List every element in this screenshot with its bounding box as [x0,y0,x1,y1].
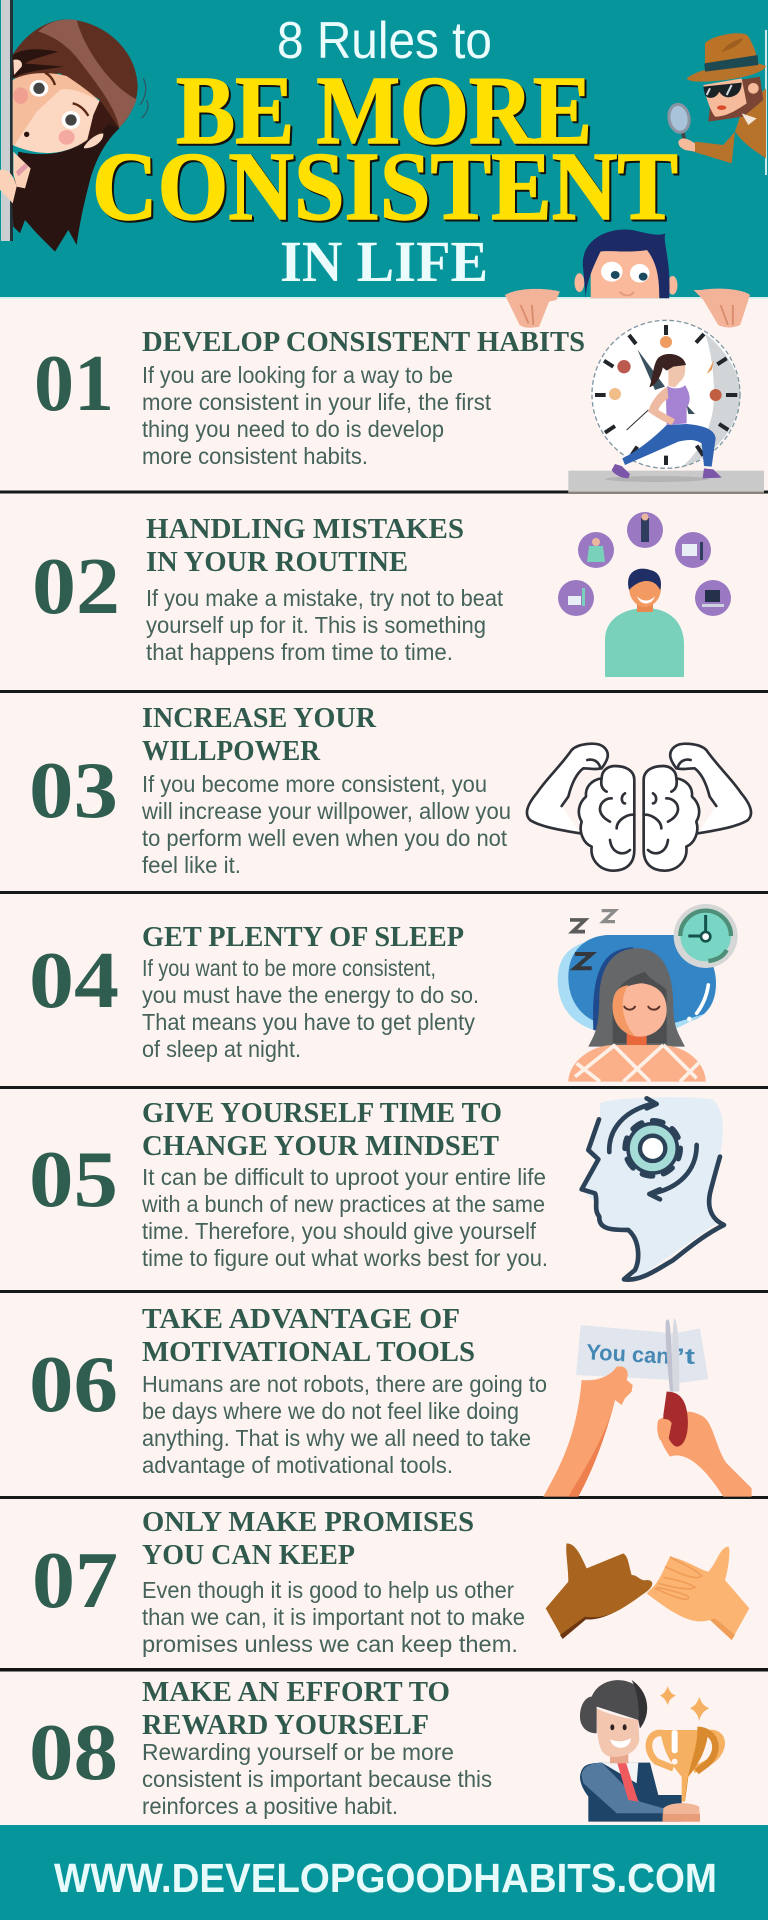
body 04: That means you have to get plenty [142,1009,475,1035]
body 05: time. Therefore, you should give yourself [142,1218,536,1244]
body 08 [142,1739,492,1819]
panel: rule 02 [32,513,503,665]
number 04: 04 [29,935,119,1025]
heading 02: IN YOUR ROUTINE [146,546,408,578]
body 01: thing you need to do is develop [142,416,444,442]
panel: rule 05 [29,1097,548,1271]
illustration: hands cutting You can't note [543,1318,752,1497]
footer band [0,1825,768,1920]
body 02: If you make a mistake, try not to beat [146,585,503,611]
title line: CONSISTENT: CONSISTENT [92,133,678,240]
body 02 [146,585,503,665]
illustration: head with gear [582,1097,724,1280]
body 01: If you are looking for a way to be [142,362,453,388]
body 04 [142,955,479,1062]
number 02: 02 [32,541,120,631]
body 06: be days where we do not feel like doing [142,1398,519,1424]
body 05 [141,1164,548,1271]
panel: rule 06 [29,1303,547,1478]
heading 02: HANDLING MISTAKES [146,513,464,545]
heading 06: TAKE ADVANTAGE OF [142,1303,460,1335]
body 05: It can be difficult to uproot your entire life [142,1164,546,1190]
number 06: 06 [29,1339,118,1429]
number 03: 03 [29,745,118,835]
number 05: 05 [29,1134,118,1224]
panel: rule 08 [29,1676,492,1819]
heading 03: WILLPOWER [142,735,321,767]
body 07 [142,1577,525,1657]
heading 07: ONLY MAKE PROMISES [142,1506,474,1538]
panel: rule 04 [29,921,479,1062]
heading 04: GET PLENTY OF SLEEP [142,921,464,953]
illustration: man with five routine bubbles [558,512,731,677]
number 07: 07 [32,1535,118,1625]
body 06 [142,1371,547,1478]
body 02: yourself up for it. This is something [146,612,486,638]
divider 4 [0,1086,768,1089]
panel: rule 03 [29,702,511,878]
body 08: reinforces a positive habit. [142,1793,398,1819]
body 03: feel like it. [142,852,241,878]
body 05: with a bunch of new practices at the same [141,1191,545,1217]
heading 08: REWARD YOURSELF [142,1709,429,1741]
heading 07: YOU CAN KEEP [142,1539,355,1571]
body 08: consistent is important because this [142,1766,492,1792]
divider 5 [0,1290,768,1293]
divider 7 [0,1668,768,1672]
heading 08 [142,1676,450,1741]
heading 03 [142,702,377,767]
body 03: will increase your willpower, allow you [141,798,511,824]
body 06: Humans are not robots, there are going to [142,1371,547,1397]
panel: rule 07 [32,1506,525,1657]
footer url: WWW.DEVELOPGOODHABITS.COM [54,1855,717,1901]
body 08: Rewarding yourself or be more [142,1739,454,1765]
illustration: man peeking over panel [505,229,750,328]
body 04: If you want to be more consistent, [142,955,436,981]
number 01: 01 [34,338,114,428]
heading 06 [142,1303,475,1368]
title line: 8 Rules to: 8 Rules to [277,12,492,70]
illustration: detective with magnifier [667,33,766,163]
illustration: door edge [1,0,13,241]
body 04: of sleep at night. [142,1036,301,1062]
illustration: peeking girl [0,19,148,252]
body 06: advantage of motivational tools. [142,1452,453,1478]
illustration: muscular brain [527,744,751,871]
body 05: time to figure out what works best for you. [142,1245,548,1271]
illustration: pinky promise hands [546,1543,749,1640]
body 03 [141,771,511,878]
illustration: hands cutting You can't note: You can [586,1339,670,1369]
header band [0,0,768,299]
body 03: to perform well even when you do not [142,825,507,851]
heading 03: INCREASE YOUR [142,702,377,734]
body 06: anything. That is why we all need to take [142,1425,531,1451]
body 04: you must have the energy to do so. [142,982,479,1008]
heading 06: MOTIVATIONAL TOOLS [142,1336,475,1368]
number 08: 08 [29,1707,118,1797]
body 03: If you become more consistent, you [142,771,487,797]
heading 08: MAKE AN EFFORT TO [142,1676,450,1708]
divider 3 [0,891,768,894]
illustration: businessman with trophy [580,1680,722,1822]
body 07: promises unless we can keep them. [142,1631,518,1657]
illustration: clock with lunging woman [568,320,764,494]
heading 05: CHANGE YOUR MINDSET [142,1130,499,1162]
divider 6 [0,1496,768,1499]
body 07: Even though it is good to help us other [142,1577,514,1603]
heading 02 [146,513,464,578]
title [92,12,678,294]
body 01 [142,362,491,469]
illustration: sleeping woman with clock [558,904,738,1082]
heading 01: DEVELOP CONSISTENT HABITS [142,326,585,358]
heading 05: GIVE YOURSELF TIME TO [142,1097,502,1129]
heading 07 [142,1506,474,1571]
illustration: hands cutting You can't note: ’t [677,1344,696,1369]
title line: BE MORE: BE MORE [176,57,592,164]
panel: rule 01 [34,326,585,469]
body 01: more consistent in your life, the first [142,389,491,415]
heading 05 [142,1097,502,1162]
body 07: than we can, it is important not to make [142,1604,525,1630]
body 01: more consistent habits. [142,443,368,469]
divider 1 [0,490,768,494]
divider 2 [0,690,768,693]
body 02: that happens from time to time. [146,639,453,665]
title line: IN LIFE: IN LIFE [280,229,488,294]
